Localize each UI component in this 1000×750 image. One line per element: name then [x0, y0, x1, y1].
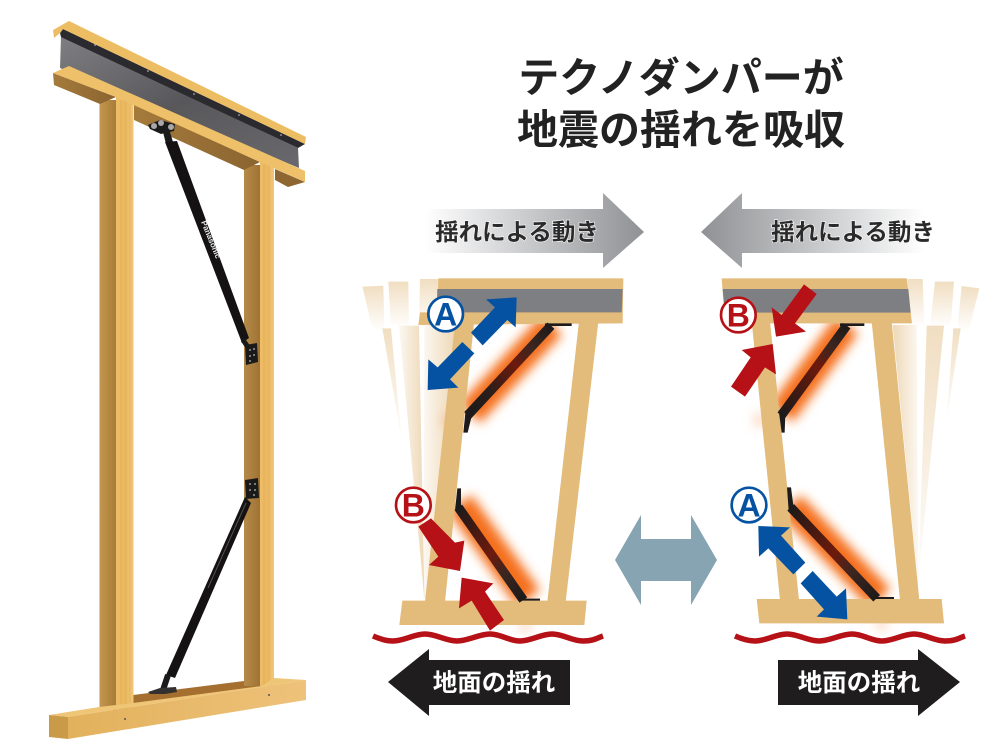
arrow: shaking motion to the left: [701, 193, 935, 268]
arrow: ground motion left: 地面の揺れ: [433, 669, 555, 697]
frame timber: [722, 278, 944, 623]
arrow: shaking motion to the right: [425, 193, 644, 268]
red arrows B: [731, 284, 817, 397]
label A: A: [434, 296, 457, 332]
blue arrows A: [428, 297, 517, 390]
motion ghost frames: [362, 279, 455, 598]
photo: wooden frame with steel beam and dampers: [49, 21, 306, 739]
ground wave right: [735, 634, 965, 641]
title: [517, 55, 845, 153]
steel beam: [723, 289, 911, 313]
damper glow: [754, 325, 888, 629]
arrow: shaking motion to the left: 揺れによる動き: [771, 219, 935, 245]
label B: [396, 487, 431, 523]
title: 地震の揺れを吸収: [517, 107, 845, 153]
steel beam: [437, 289, 623, 312]
arrow: ground motion left: [388, 649, 570, 716]
label B: [721, 297, 756, 333]
label B: B: [402, 487, 425, 523]
steel I-beam: [60, 29, 305, 168]
label A: A: [737, 487, 761, 523]
red arrows B: [418, 518, 504, 631]
label A: [732, 487, 766, 523]
arrow: shaking motion to the right: 揺れによる動き: [435, 219, 599, 245]
brand label on damper: Panasonic: [199, 219, 223, 260]
upper flange wood: [53, 21, 306, 144]
left post: [100, 97, 134, 710]
lower damper: [148, 478, 259, 694]
lower damper: [455, 488, 540, 601]
title: テクノダンパーが: [518, 55, 844, 101]
upper damper: [779, 323, 864, 433]
arrow: ground motion right: 地面の揺れ: [798, 669, 920, 697]
damper glow: [442, 325, 552, 631]
arrow: ground motion right: [778, 649, 960, 716]
panel: left frame diagram: [362, 278, 623, 631]
right post: [244, 162, 274, 686]
label A: [428, 296, 463, 332]
upper damper: [463, 323, 572, 433]
frame timber: [399, 278, 623, 625]
upper damper: [148, 120, 258, 365]
back sill: [133, 679, 263, 706]
lower beam wood: [53, 66, 305, 187]
motion ghost frames: [893, 279, 979, 587]
label B: B: [727, 297, 750, 333]
foot sill: [49, 678, 306, 739]
arrow: two-way between diagrams: [615, 515, 717, 605]
ground wave left: [373, 634, 603, 641]
panel: right frame diagram: [721, 278, 979, 629]
lower damper: [787, 487, 894, 599]
blue arrows A: [758, 526, 847, 619]
